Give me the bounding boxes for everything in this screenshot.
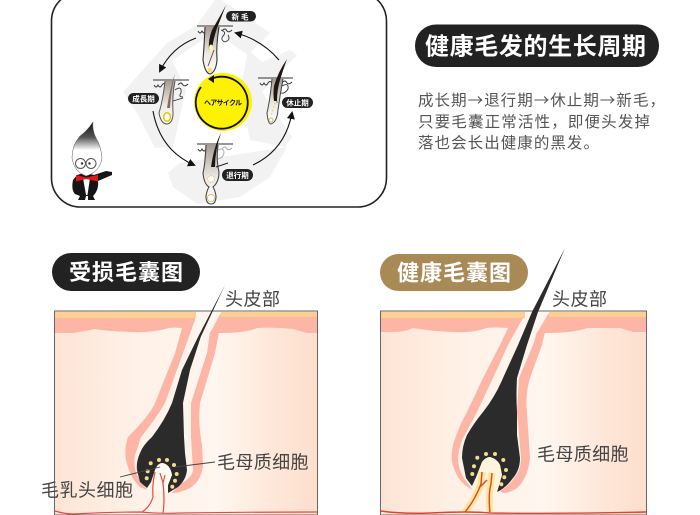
cycle arrows bbox=[153, 33, 292, 165]
panel: healthy follicle bbox=[380, 248, 646, 515]
blood vessels bbox=[381, 472, 646, 513]
epidermis band right bbox=[210, 312, 317, 333]
label: matrix cells: 毛母质细胞 bbox=[217, 452, 308, 472]
description text bbox=[418, 88, 665, 153]
blood vessels bbox=[55, 472, 317, 514]
label: resting phase: 休止期 bbox=[286, 98, 309, 108]
rounded frame bbox=[52, 0, 386, 207]
epidermis band left bbox=[55, 312, 196, 333]
label: growth phase: 成長期 bbox=[132, 94, 155, 104]
follicle sheath: right bbox=[500, 332, 545, 493]
decorative grey background shapes bbox=[123, 0, 297, 204]
heading: healthy follicle bbox=[380, 254, 528, 291]
label: growth phase bbox=[128, 93, 159, 104]
panel: hair cycle diagram bbox=[52, 0, 386, 207]
heading: damaged follicle bbox=[52, 253, 200, 291]
label: scalp: 头皮部 bbox=[552, 290, 607, 310]
label: papilla cells: 毛乳头细胞 bbox=[41, 480, 133, 500]
label: matrix cells: 毛母质细胞 bbox=[537, 444, 628, 464]
label: new hair: 新毛 bbox=[232, 12, 250, 22]
label: new hair bbox=[226, 11, 256, 22]
follicle: growth phase bbox=[153, 73, 189, 124]
heading: damaged follicle: 受损毛囊图 bbox=[69, 260, 183, 285]
description text: 成长期→退行期→休止期→新毛， bbox=[418, 88, 665, 110]
description text: 落也会长出健康的黑发。 bbox=[418, 131, 599, 153]
hair shaft and bulb bbox=[137, 285, 225, 493]
centre yellow disc: hair cycle: ヘアサイクル bbox=[204, 98, 242, 107]
melanocyte dots bbox=[145, 458, 179, 489]
follicle: catagen phase bbox=[197, 133, 233, 204]
follicle sheath: left bbox=[125, 320, 195, 490]
mascot bbox=[72, 122, 112, 200]
melanocyte dots bbox=[470, 452, 508, 486]
label: scalp: 头皮部 bbox=[225, 290, 280, 310]
title pill bbox=[415, 24, 659, 67]
follicle sheath: right bbox=[172, 332, 219, 493]
hair shaft and bulb bbox=[462, 248, 565, 492]
centre yellow disc: hair cycle bbox=[194, 73, 252, 131]
papilla bbox=[151, 463, 172, 493]
label: resting phase bbox=[282, 97, 313, 108]
title pill: 健康毛发的生长周期 bbox=[425, 34, 646, 60]
description text: 只要毛囊正常活性，即便头发掉 bbox=[418, 110, 650, 132]
panel: damaged follicle bbox=[41, 285, 318, 515]
epidermis band left bbox=[381, 312, 525, 332]
skin background bbox=[380, 311, 646, 515]
follicle: new hair bbox=[197, 5, 233, 74]
label: catagen phase: 退行期 bbox=[226, 170, 249, 180]
glow around vessels bbox=[465, 472, 492, 512]
label: catagen phase bbox=[222, 169, 253, 181]
heading: healthy follicle: 健康毛囊图 bbox=[397, 260, 511, 286]
papilla bbox=[474, 457, 502, 492]
follicle: resting phase bbox=[258, 59, 293, 124]
follicle sheath: left bbox=[452, 316, 524, 490]
skin background bbox=[54, 311, 318, 515]
leader lines bbox=[120, 462, 215, 477]
epidermis band right bbox=[537, 312, 646, 333]
